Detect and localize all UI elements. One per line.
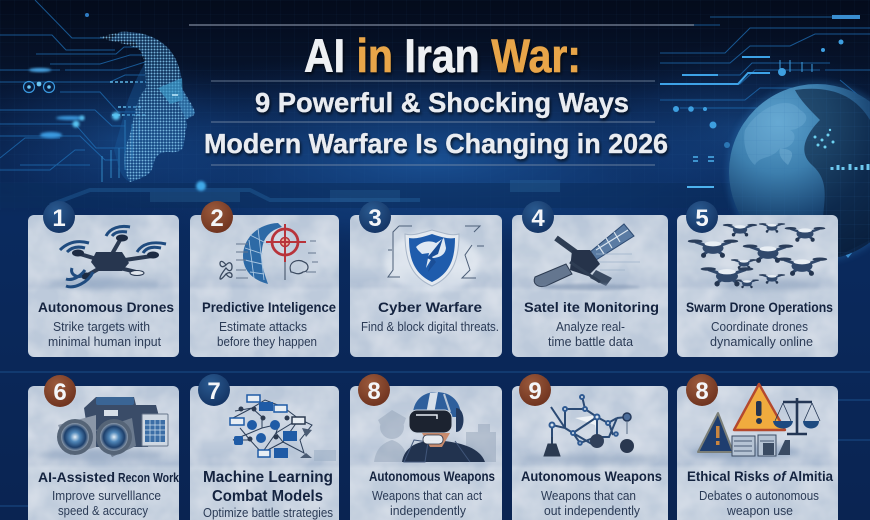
icon: drone swarm: [688, 223, 827, 291]
card number badge: 7: [207, 378, 221, 405]
panel: 8 autonomous weapons pilot: [350, 374, 502, 520]
card title: Predictive Inteligence: [202, 299, 336, 315]
card number badge: [519, 374, 551, 406]
right glowing nodes: [673, 40, 844, 188]
card number badge: [358, 374, 390, 406]
right circuit lines: [660, 17, 870, 108]
card number badge: [359, 201, 391, 233]
panel: 2 predictive intelligence: [190, 201, 339, 357]
card description: [541, 489, 641, 518]
icon: warning signs and scales: [690, 384, 820, 460]
card number badge: 4: [531, 205, 545, 232]
card description: [699, 489, 819, 518]
subheading line 1: 9 Powerful & Shocking Ways: [255, 87, 629, 118]
icon: satellite: [534, 224, 640, 290]
card number badge: 3: [368, 205, 382, 232]
card title: [38, 469, 179, 485]
icon: neural network diagram: [230, 395, 336, 461]
card title: Swarm Drone Operations: [686, 299, 833, 315]
card number badge: 8: [695, 378, 709, 405]
card description: [548, 320, 633, 349]
card description: [217, 320, 317, 349]
card description: Coordinate drones: [711, 320, 808, 334]
card description: Weapons that can act: [372, 489, 482, 503]
card description: speed & accuracy: [58, 504, 149, 518]
card description: time battle data: [548, 335, 633, 349]
card number badge: [44, 375, 76, 407]
icon: target and data arc: [220, 223, 318, 284]
card number badge: 6: [53, 379, 67, 406]
card title: AI-Assisted: [38, 469, 115, 485]
panel: 1 autonomous drones: [28, 201, 179, 357]
card description: Strike targets with: [53, 320, 150, 334]
card number badge: 5: [695, 205, 709, 232]
card description: minimal human input: [48, 335, 162, 349]
left glowing nodes: [24, 13, 206, 191]
left circuit lines: [0, 0, 146, 182]
card description: [710, 320, 813, 349]
subheading line 2: Modern Warfare Is Changing in 2026: [204, 128, 668, 159]
icon: shield: [384, 226, 484, 292]
card description: Estimate attacks: [219, 320, 307, 334]
card number badge: [686, 201, 718, 233]
card number badge: 9: [528, 378, 542, 405]
card title: Autonomous Drones: [38, 299, 174, 315]
card title: Autonomous Weapons: [369, 468, 495, 484]
panel: 9 autonomous weapons network: [512, 374, 668, 520]
icon: binoculars: [38, 397, 168, 461]
card description: dynamically online: [710, 335, 813, 349]
panel: 3 cyber warfare: [350, 201, 502, 357]
card number badge: 2: [210, 205, 224, 232]
panel: 6 ai-assisted recon: [28, 375, 179, 520]
icon: soldier with helmet: [374, 392, 496, 462]
title block: [189, 25, 694, 165]
icon: drone: [50, 226, 166, 290]
card title: Ethical Risks of Almitia: [687, 468, 833, 484]
card description: Find & block digital threats.: [361, 320, 499, 334]
card description: [48, 320, 162, 349]
card description: out independently: [544, 504, 641, 518]
icon: AI head of dots: [100, 32, 195, 182]
main heading: AI in Iran War:: [304, 29, 581, 82]
card description: Debates o autonomous: [699, 489, 819, 503]
card number badge: 8: [367, 378, 381, 405]
card title: Combat Models: [212, 488, 323, 505]
card description: independently: [390, 504, 467, 518]
card number badge: [522, 201, 554, 233]
card number badge: [686, 374, 718, 406]
card title: Cyber Warfare: [378, 299, 482, 315]
card description: before they happen: [217, 335, 317, 349]
panel: 5 swarm drone operations: [677, 201, 838, 357]
card title: Recon Work: [118, 471, 179, 485]
card number badge: [43, 201, 75, 233]
panel: 4 satellite monitoring: [512, 201, 668, 357]
panel: 10 ethical risks: [677, 374, 838, 520]
card title: Satel ite Monitoring: [524, 299, 659, 315]
card description: weapon use: [726, 504, 793, 518]
card description: Optimize battle strategies: [203, 506, 333, 520]
card title: Machine Learning: [203, 469, 333, 486]
card number badge: 1: [52, 205, 66, 232]
card description: Weapons that can: [541, 489, 636, 503]
card description: Improve survelllance: [52, 489, 161, 503]
icon: node network with weights: [520, 395, 660, 463]
icon: globe: [726, 80, 870, 270]
card title: Autonomous Weapons: [521, 468, 662, 484]
card title: [203, 469, 333, 505]
card description: [52, 489, 161, 518]
panel: 7 machine learning combat models: [190, 374, 339, 520]
card number badge: [198, 374, 230, 406]
card description: [372, 489, 482, 518]
card description: Analyze real-: [556, 320, 625, 334]
card number badge: [201, 201, 233, 233]
